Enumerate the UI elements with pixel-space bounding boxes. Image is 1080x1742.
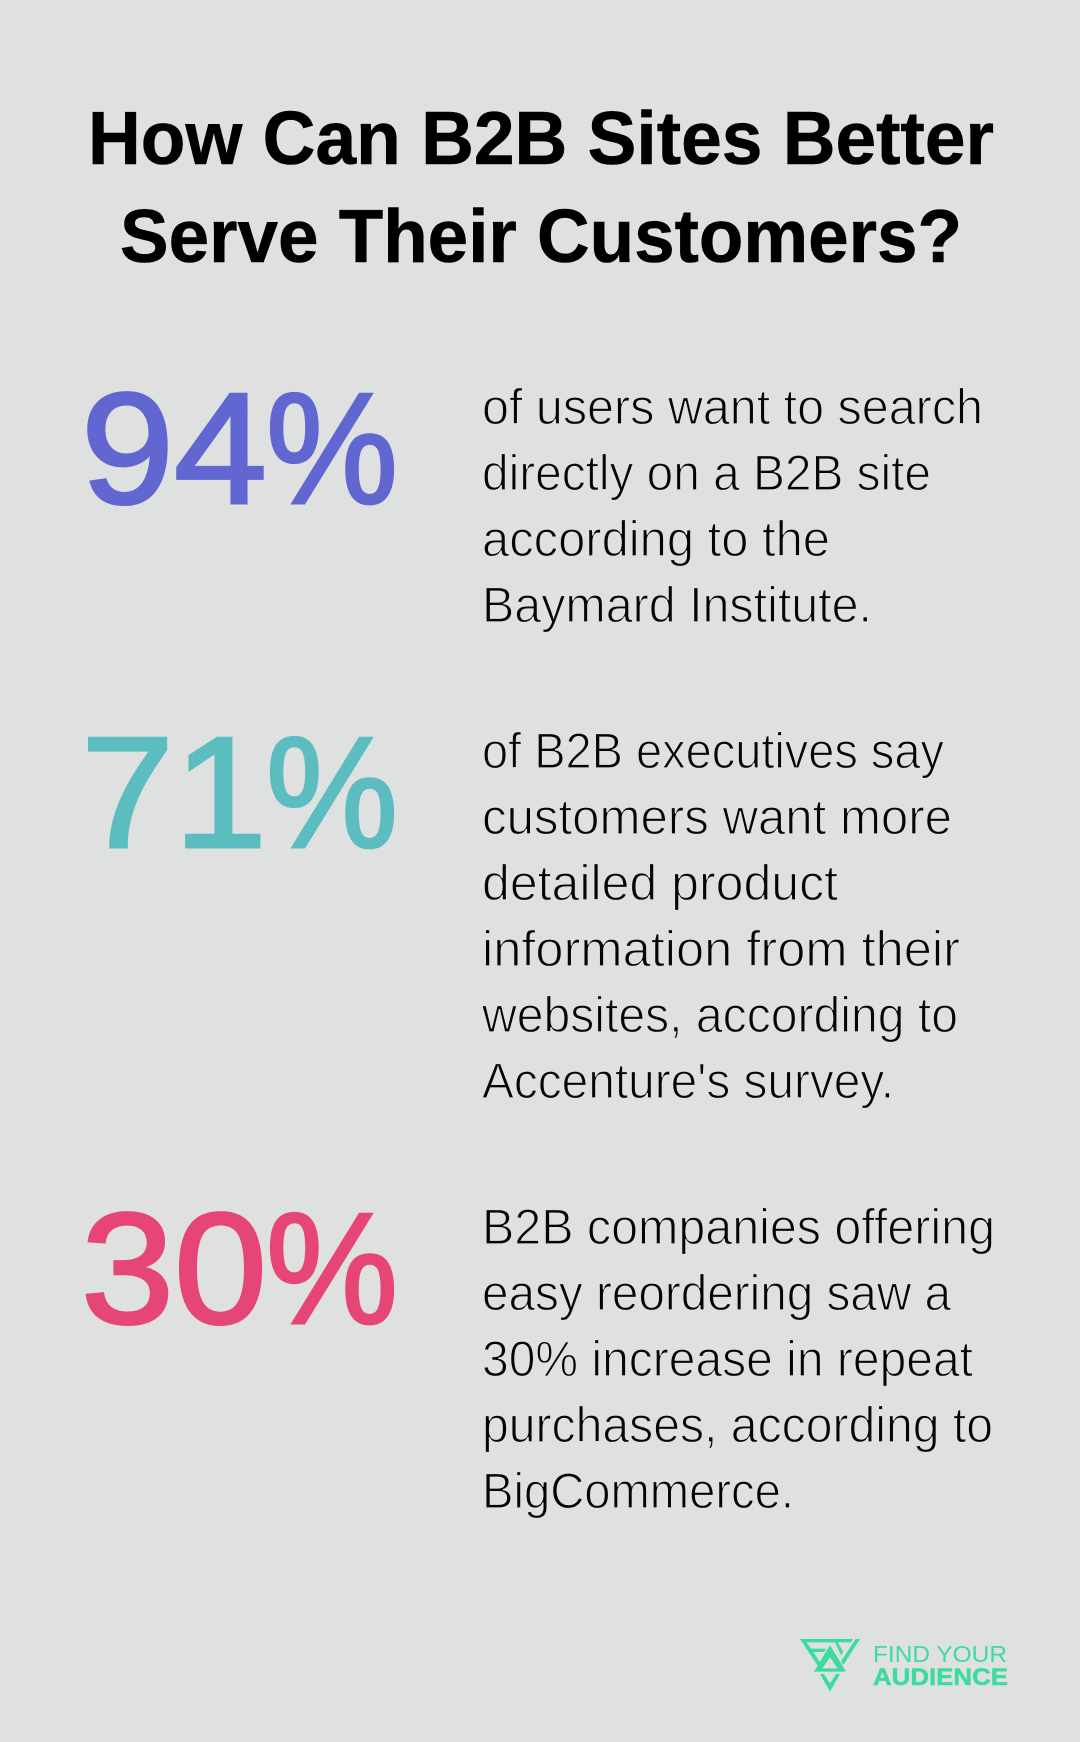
number: 94%: % bbox=[266, 361, 398, 537]
number: 30% bbox=[81, 1181, 398, 1357]
title bbox=[88, 96, 994, 278]
text: 94% description: of users want to search bbox=[482, 379, 983, 435]
text: 30% description: 30% increase in repeat bbox=[482, 1331, 973, 1387]
text: 30% description: easy reordering saw a bbox=[482, 1265, 951, 1321]
icon: triangle mark bbox=[800, 1639, 860, 1692]
panel: stat 94% bbox=[81, 361, 983, 633]
text: 94% description: directly on a B2B site bbox=[482, 445, 931, 501]
number: 94% bbox=[81, 361, 398, 537]
text: 94% description: Baymard Institute. bbox=[482, 577, 872, 633]
title: How Can B2B Sites Better bbox=[88, 96, 994, 180]
text: 30% description: B2B companies offering bbox=[482, 1199, 995, 1255]
text: 94% description: according to the bbox=[482, 511, 830, 567]
number: 30%: 30 bbox=[81, 1181, 267, 1357]
title: Serve Their Customers? bbox=[120, 194, 962, 278]
text: 71% description: customers want more bbox=[482, 789, 952, 845]
text: logo wordmark: FIND YOUR bbox=[873, 1641, 1007, 1667]
text: 71% description: detailed product bbox=[482, 855, 838, 911]
number: 30%: % bbox=[266, 1181, 398, 1357]
logo: Find Your Audience bbox=[800, 1639, 1008, 1692]
number: 71%: % bbox=[266, 705, 398, 881]
text: 71% description: websites, according to bbox=[481, 987, 958, 1043]
text: 71% description: of B2B executives say bbox=[482, 723, 944, 779]
number: 71% bbox=[81, 705, 398, 881]
text: 71% description bbox=[481, 723, 960, 1109]
panel: stat 71% bbox=[81, 705, 960, 1109]
text: 30% description: purchases, according to bbox=[482, 1397, 993, 1453]
number: 71%: 71 bbox=[81, 705, 267, 881]
text: 30% description: BigCommerce. bbox=[482, 1463, 794, 1519]
text: logo wordmark: AUDIENCE bbox=[873, 1664, 1008, 1691]
text: 71% description: information from their bbox=[482, 921, 960, 977]
text: 71% description: Accenture's survey. bbox=[482, 1053, 894, 1109]
number: 94%: 94 bbox=[81, 361, 267, 537]
panel: stat 30% bbox=[81, 1181, 995, 1519]
text: logo wordmark bbox=[873, 1641, 1008, 1691]
text: 30% description bbox=[482, 1199, 995, 1519]
text: 94% description bbox=[482, 379, 983, 633]
